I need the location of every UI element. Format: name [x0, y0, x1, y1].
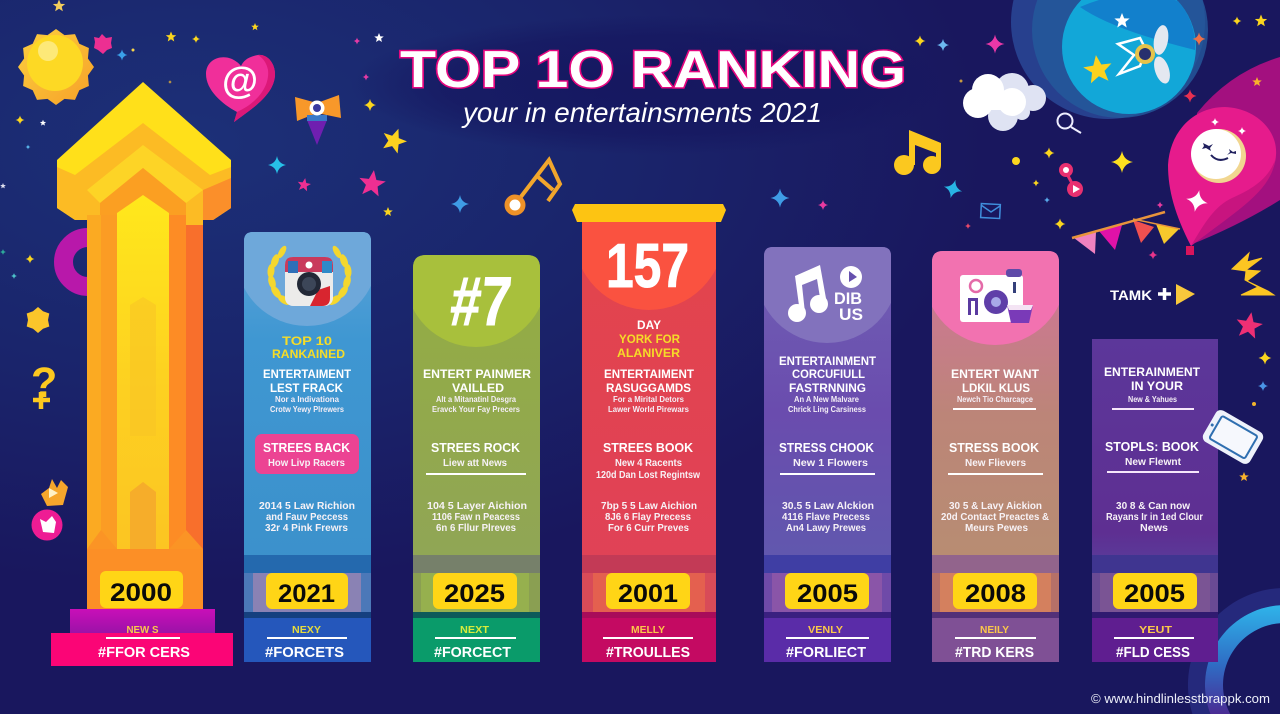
- badge: 2008: [953, 573, 1037, 609]
- icon: hexagon star: [27, 307, 49, 333]
- column 4: red panel: For a Mirital Detors: [613, 395, 685, 404]
- column 7: violet panel: STOPLS: BOOK: [1105, 439, 1200, 454]
- badge: 2021: 2021: [278, 580, 335, 608]
- column 2: blue panel: TOP 10: [282, 334, 332, 348]
- column 2: blue panel: ENTERTAIMENT: [263, 369, 351, 381]
- icon: gold star on planet: [1082, 53, 1114, 84]
- column 6: pink tan panel: Newch Tio Charcagce: [957, 395, 1033, 404]
- badge: 2005: 2005: [797, 580, 858, 608]
- column 7: violet panel: IN YOUR: [1131, 381, 1184, 393]
- column 4: red panel: For 6 Curr Preves: [608, 523, 689, 534]
- column 3: green panel: 1106 Faw n Peacess: [432, 512, 520, 523]
- column 4: red panel: ALANIVER: [617, 346, 680, 360]
- column 2: blue panel: and Fauv Peccess: [266, 512, 348, 523]
- icon: envelope: [981, 204, 1000, 219]
- label: tamk plus: TAMK: [1110, 287, 1152, 303]
- column 6: pink tan panel: #TRD KERS: [955, 644, 1034, 661]
- column 5: purple panel: An4 Lawy Prewes: [786, 523, 866, 534]
- column 6: pink tan panel: New Flievers: [965, 458, 1026, 469]
- badge: 2008: 2008: [965, 580, 1026, 608]
- column 4: red panel: DAY: [637, 320, 661, 332]
- column 7: violet panel: Rayans Ir in 1ed Clour: [1106, 512, 1203, 523]
- icon: bow: [295, 95, 341, 145]
- callout: streets back: STREES BACK: [263, 440, 351, 455]
- column 6: pink tan panel: 30 5 & Lavy Aickion: [949, 501, 1042, 512]
- column 4: red panel: RASUGGAMDS: [606, 383, 691, 395]
- icon: question mark: ?: [31, 359, 57, 407]
- column 7: violet panel: New & Yahues: [1128, 395, 1177, 404]
- icon: white camera: [960, 269, 1033, 323]
- column 5: purple panel: #FORLIECT: [786, 644, 866, 661]
- column 4: red panel: STREES BOOK: [603, 440, 694, 455]
- column 5: purple panel: New 1 Flowers: [793, 458, 868, 469]
- column 4: red panel: Lawer World Pirewars: [608, 405, 690, 414]
- icon: crown: [41, 479, 68, 506]
- rank number: #7: [448, 262, 515, 340]
- decorative stars left: [0, 0, 410, 279]
- column 5: purple panel: CORCUFIULL: [792, 369, 865, 381]
- column 2: blue panel: RANKAINED: [272, 347, 345, 361]
- background planet: [1011, 0, 1208, 119]
- icon: white star on planet: [1114, 13, 1130, 27]
- icon: bunting: [1072, 212, 1180, 254]
- base: magenta step: [70, 609, 215, 633]
- icon: music note with play: US: [839, 305, 863, 324]
- icon: camera with laurels: [267, 244, 352, 307]
- ring shape bottom right: [1188, 588, 1280, 714]
- icon: music note with play: DIB: [834, 289, 862, 308]
- column 7: violet panel: 30 8 & Can now: [1116, 501, 1190, 512]
- column 4: red panel: 8J6 6 Flay Precess: [605, 512, 691, 523]
- badge: 2000: 2000: [110, 579, 172, 607]
- column 5: purple panel: 30.5 5 Law Alckion: [782, 501, 874, 512]
- column 7: violet panel: [1092, 339, 1218, 662]
- icon: heart with at sign: [206, 55, 275, 122]
- column 6: pink tan panel: LDKIL KLUS: [962, 383, 1030, 395]
- footer label: new s: NEW S: [126, 625, 159, 636]
- base: pink step: [51, 633, 233, 666]
- column 2: blue panel: 32r 4 Pink Frewrs: [265, 523, 348, 534]
- column 3: green panel: Eravck Your Fay Precers: [432, 405, 521, 414]
- column 4: red panel: YORK FOR: [619, 332, 680, 346]
- icon: music note gold: [894, 130, 941, 175]
- callout: streets back: How Livp Racers: [268, 458, 345, 469]
- rank number: 157: [606, 232, 689, 301]
- badge: 2005: [785, 573, 869, 609]
- column 2: blue panel: NEXY: [292, 625, 321, 636]
- icon: pink circle hand: [32, 510, 62, 540]
- icon: cloud: [963, 73, 1046, 131]
- column 6: pink tan panel: STRESS BOOK: [949, 440, 1040, 455]
- column 3: green panel: 104 5 Layer Aichion: [427, 501, 527, 512]
- column 2: blue panel: [244, 232, 371, 662]
- column 3: green panel: Alt a Mitanatinl Desgra: [436, 395, 516, 404]
- decorative stars centre and right: [451, 14, 1272, 481]
- column 7: violet panel: YEUT: [1139, 625, 1172, 636]
- column 2: blue panel: Crotw Yewy Plrewers: [270, 405, 345, 414]
- icon: lightning: [1232, 253, 1274, 295]
- callout: streets back: [255, 434, 359, 474]
- label: tamk plus: [1110, 284, 1195, 305]
- badge: 2000: [100, 571, 183, 608]
- column 6: pink tan panel: 20d Contact Preactes &: [941, 512, 1049, 523]
- copyright: © www.hindlinlesstbrappk.com: [1091, 691, 1270, 706]
- column 5: purple panel: VENLY: [808, 625, 843, 636]
- column 4: red panel: 120d Dan Lost Regintsw: [596, 470, 700, 481]
- icon: smiling moon face: [1191, 129, 1246, 183]
- column 4: red panel: ENTERTAIMENT: [604, 369, 694, 381]
- subtitle: your in entertainsments 2021: [461, 97, 822, 128]
- column 7: violet panel: News: [1140, 523, 1168, 534]
- ring behind arrow: [64, 238, 112, 286]
- icon: hearts connector: [1059, 163, 1083, 197]
- column 7: violet panel: ENTERAINMENT: [1104, 367, 1200, 379]
- column 6: pink tan panel: NEILY: [980, 625, 1009, 636]
- column 5: purple panel: FASTRNNING: [789, 383, 866, 395]
- column 6: pink tan panel: Meurs Pewes: [965, 523, 1028, 534]
- column 4: red panel: New 4 Racents: [615, 458, 682, 469]
- column 5: purple panel: ENTERTAINMENT: [779, 356, 876, 368]
- icon: sun: [18, 29, 94, 105]
- balloon: [1168, 57, 1280, 255]
- column 6: pink tan panel: [932, 251, 1059, 662]
- column 4: red panel: 7bp 5 5 Law Aichion: [601, 501, 697, 512]
- badge: 2021: [266, 573, 348, 609]
- column 3: green panel: ENTERT PAINMER: [423, 369, 532, 381]
- badge: 2025: [433, 573, 517, 609]
- column 7: violet panel: New Flewnt: [1125, 457, 1182, 468]
- icon: heart with at sign: @: [222, 60, 258, 101]
- badge: 2001: 2001: [618, 580, 678, 608]
- icon: music note small: [507, 160, 560, 213]
- column 7: violet panel: #FLD CESS: [1116, 644, 1190, 661]
- column 1: gold arrow: [51, 82, 233, 666]
- column 5: purple panel: 4116 Flave Precess: [782, 512, 870, 523]
- column 4: red panel: #TROULLES: [606, 644, 690, 661]
- column 3: green panel: [413, 255, 540, 662]
- column 3: green panel: 6n 6 Fllur Plreves: [436, 523, 516, 534]
- column 2: blue panel: LEST FRACK: [270, 383, 344, 395]
- column 3: green panel: NEXT: [460, 625, 489, 636]
- badge: 2005: [1113, 573, 1197, 609]
- title halo: [350, 15, 950, 155]
- icon: propeller: [1118, 24, 1173, 85]
- column 3: green panel: #FORCECT: [434, 644, 511, 661]
- icon: music note with play: [788, 265, 863, 324]
- column 2: blue panel: 2014 5 Law Richion: [259, 501, 355, 512]
- column 3: green panel: Liew att News: [443, 458, 507, 469]
- column 4: red panel: [572, 160, 726, 662]
- column 3: green panel: VAILLED: [452, 383, 504, 395]
- footer tag: ffor cers: #FFOR CERS: [98, 644, 190, 661]
- badge: 2025: 2025: [444, 580, 505, 608]
- column 2: blue panel: #FORCETS: [265, 644, 344, 661]
- column 5: purple panel: An A New Malvare: [794, 395, 860, 404]
- badge: 2001: [606, 573, 690, 609]
- column 3: green panel: STREES ROCK: [431, 440, 521, 455]
- column 2: blue panel: Nor a Indivationa: [275, 395, 340, 404]
- icon: pink badge star: [94, 34, 112, 54]
- icon: phone: [1201, 408, 1265, 466]
- cap: [572, 204, 726, 222]
- column 5: purple panel: STRESS CHOOK: [779, 440, 875, 455]
- column 4: red panel: MELLY: [631, 625, 665, 636]
- column 5: purple panel: Chrick Ling Carsiness: [788, 405, 866, 414]
- title: TOP 1O RANKING: [400, 41, 906, 99]
- icon: magnifier: [1058, 114, 1081, 133]
- column 6: pink tan panel: ENTERT WANT: [951, 369, 1039, 381]
- badge: 2005: 2005: [1124, 580, 1185, 608]
- column 5: purple panel: [764, 247, 891, 662]
